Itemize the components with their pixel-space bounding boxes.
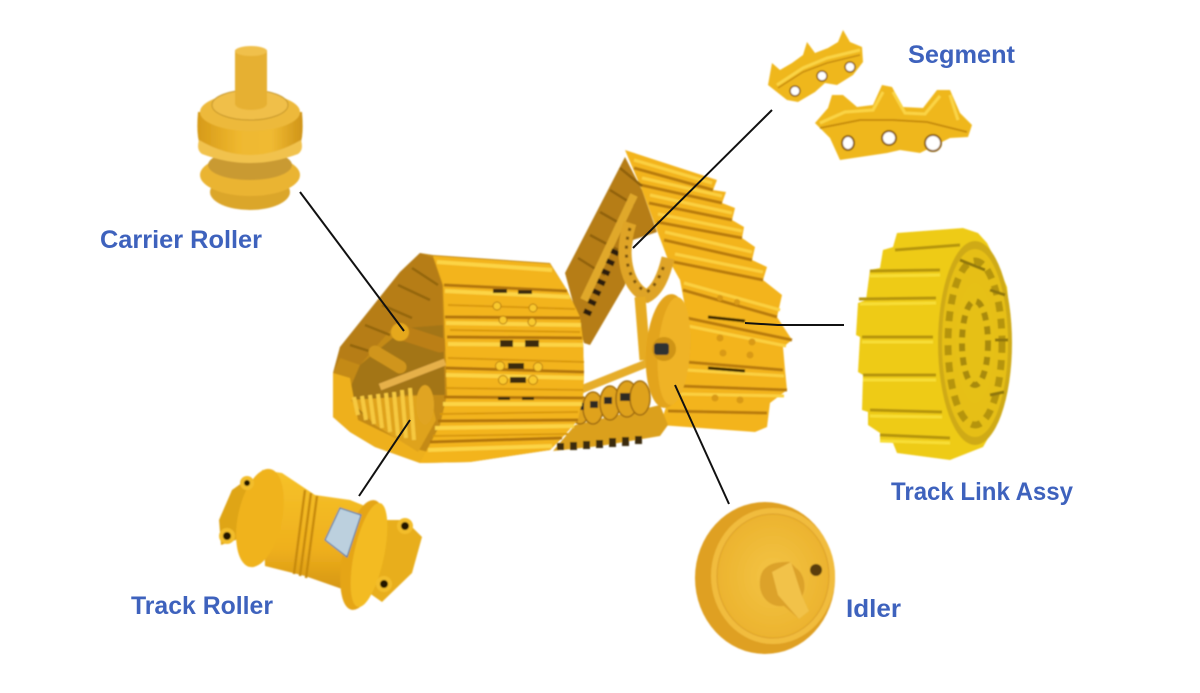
rear track [553, 150, 792, 451]
roller flanges [228, 465, 292, 571]
front track [333, 253, 584, 463]
support arm and rod [640, 297, 645, 360]
shaft [235, 50, 267, 104]
label: Carrier Roller: Carrier Roller [100, 226, 262, 254]
label: Track Link Assy: Track Link Assy [891, 478, 1073, 506]
lower rollers and outer band [333, 373, 440, 463]
body [262, 470, 375, 600]
inner gap and carrier rollers [345, 325, 445, 420]
label: Segment: Segment [908, 41, 1016, 69]
bolt holes [221, 478, 411, 590]
rear track bolts and gaps [708, 317, 745, 371]
rear track tread [625, 150, 792, 432]
roller label [325, 508, 361, 557]
connector lines [300, 110, 844, 504]
rear track chain [584, 195, 634, 300]
label: Idler: Idler [846, 595, 901, 623]
front track silhouette [333, 253, 584, 463]
track chain base [553, 405, 668, 451]
idler hub [760, 562, 809, 619]
track link plates [859, 245, 960, 438]
left end block [219, 477, 250, 545]
small segment [768, 30, 863, 102]
track link inner rings [938, 241, 1012, 445]
bottom rollers [571, 381, 650, 424]
sprocket arc [625, 223, 668, 296]
front tread gaps and bolts [493, 289, 539, 400]
part: idler [695, 502, 835, 654]
part: segments [768, 30, 972, 160]
right end block [365, 520, 422, 602]
inner tread [333, 253, 443, 373]
idler wheel on track [642, 293, 694, 409]
part: track link assembly [856, 228, 1012, 460]
part: carrier roller [197, 46, 303, 210]
front tread plates [420, 256, 584, 463]
part: track roller [219, 465, 422, 614]
large segment [815, 85, 972, 160]
label: Track Roller: Track Roller [131, 592, 273, 620]
rear track inner face [565, 157, 657, 345]
main image: track undercarriage [333, 150, 792, 463]
